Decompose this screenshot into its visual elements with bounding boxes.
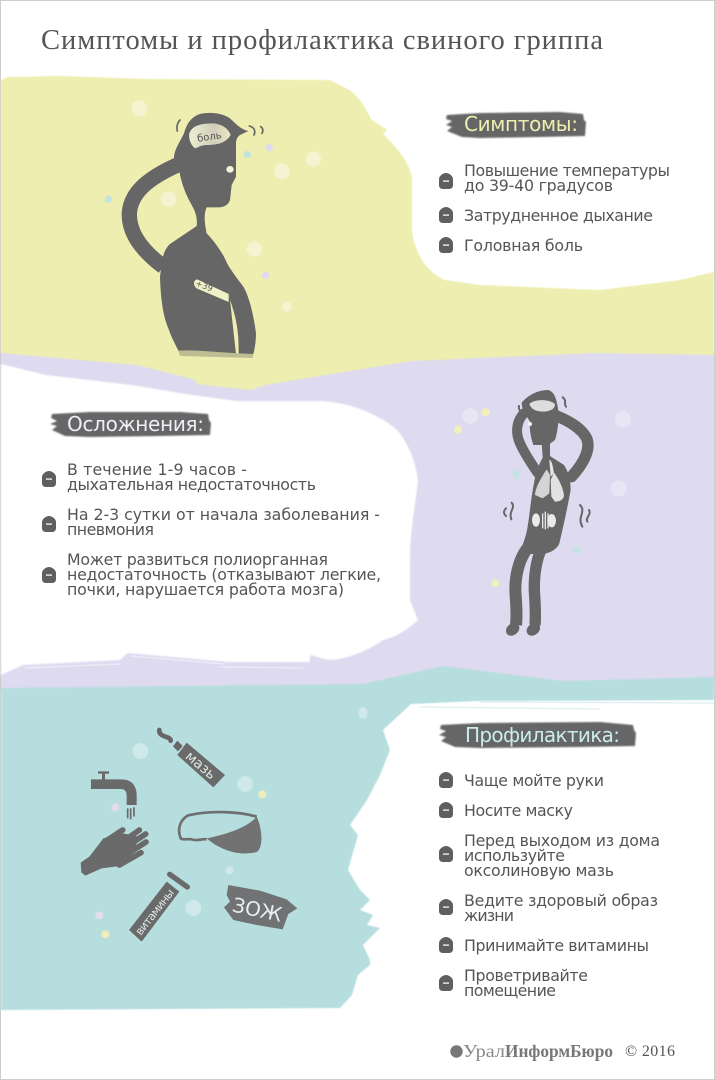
list: complications bbox=[42, 460, 381, 599]
background band: lilac bbox=[1, 350, 714, 692]
decorative dots around first figure bbox=[105, 100, 321, 312]
list: prevention: Проветривайте bbox=[464, 966, 588, 985]
list: complications: На 2-3 сутки от начала заболевания - bbox=[67, 505, 380, 524]
list: complications: Может развиться полиорганная bbox=[67, 550, 328, 569]
brain patch with pain label: боль bbox=[196, 130, 223, 145]
list: symptoms bbox=[439, 161, 670, 255]
icon: healthy lifestyle badge: ЗОЖ bbox=[230, 893, 285, 927]
list: prevention bbox=[439, 771, 660, 1000]
prevention illustrations bbox=[81, 730, 297, 942]
icon: vitamins tube: витамины bbox=[132, 886, 177, 938]
footer: publisher logo and copyright: ИнформБюро bbox=[505, 1041, 613, 1061]
list: complications: дыхательная недостаточность bbox=[67, 475, 316, 494]
footer: publisher logo and copyright bbox=[450, 1041, 675, 1061]
fever patch bbox=[194, 278, 229, 302]
footer: publisher logo and copyright: Урал bbox=[463, 1041, 505, 1061]
list: complications: почки, нарушается работа мозга) bbox=[67, 580, 344, 599]
list: prevention: Перед выходом из дома bbox=[464, 831, 660, 850]
decorative dots around prevention icons bbox=[95, 743, 266, 938]
list: complications: В течение 1-9 часов - bbox=[67, 460, 247, 479]
list: prevention: Носите маску bbox=[464, 801, 573, 820]
head patch bbox=[529, 400, 555, 412]
list: complications: недостаточность (отказывают легкие, bbox=[67, 565, 381, 584]
background panel: white complications area bbox=[1, 364, 418, 675]
ear bbox=[528, 422, 532, 426]
icon: healthy lifestyle badge bbox=[224, 885, 297, 929]
icon: face mask bbox=[179, 812, 261, 854]
silhouette bbox=[129, 113, 256, 354]
pain marks bbox=[177, 120, 263, 135]
heading: complications: Осложнения: bbox=[67, 412, 204, 436]
shaking marks bbox=[504, 397, 590, 527]
figure: person with affected organs bbox=[454, 390, 631, 638]
list: prevention: оксолиновую мазь bbox=[464, 861, 614, 880]
waist stripe bbox=[178, 350, 253, 358]
list: prevention: Чаще мойте руки bbox=[464, 771, 604, 790]
background band: yellow bbox=[1, 76, 714, 390]
figure: person with headache and fever bbox=[105, 100, 321, 358]
ear bbox=[226, 166, 234, 173]
icon: vitamins tube bbox=[129, 874, 187, 942]
list: symptoms: до 39-40 градусов bbox=[464, 176, 613, 195]
brain patch with pain label bbox=[189, 123, 231, 148]
list: prevention: Ведите здоровый образ bbox=[464, 891, 658, 910]
list: prevention: жизни bbox=[464, 906, 514, 925]
icon: ointment tube: мазь bbox=[182, 748, 219, 783]
kidneys bbox=[532, 512, 556, 529]
lungs bbox=[535, 460, 564, 502]
list: prevention: используйте bbox=[464, 846, 565, 865]
list: prevention: помещение bbox=[464, 981, 556, 1000]
list: symptoms: Головная боль bbox=[464, 236, 583, 255]
fever patch: +39 bbox=[194, 278, 214, 293]
background band: teal bbox=[1, 666, 714, 1010]
list: prevention: Принимайте витамины bbox=[464, 936, 649, 955]
icon: ointment tube bbox=[159, 730, 225, 787]
decorative dots around second figure bbox=[454, 408, 631, 587]
heading: symptoms: Симптомы: bbox=[464, 112, 578, 136]
icon: hand bbox=[81, 830, 146, 876]
title: Симптомы и профилактика свиного гриппа bbox=[41, 25, 603, 56]
silhouette bbox=[503, 390, 588, 638]
icon: water tap bbox=[91, 771, 137, 819]
list: complications: пневмония bbox=[67, 520, 154, 539]
heading: prevention: Профилактика: bbox=[465, 723, 620, 747]
list: symptoms: Повышение температуры bbox=[464, 161, 670, 180]
list: symptoms: Затрудненное дыхание bbox=[464, 206, 653, 225]
footer: publisher logo and copyright: © 2016 bbox=[625, 1043, 675, 1060]
